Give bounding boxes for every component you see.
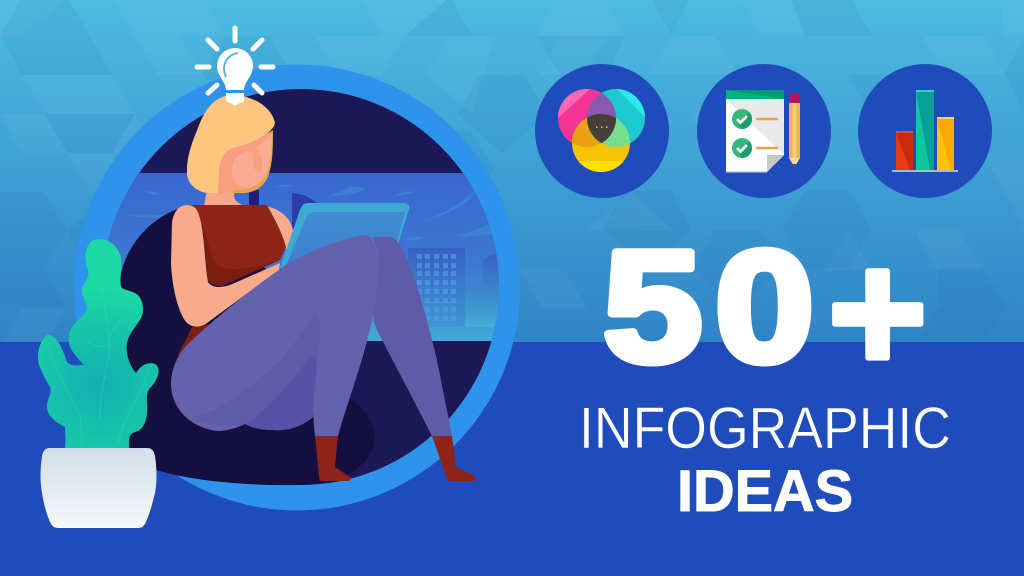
hair back rim — [232, 130, 273, 193]
dress lower — [177, 324, 220, 357]
pot — [40, 448, 156, 528]
face — [232, 134, 272, 187]
tablet — [280, 203, 409, 270]
right shoulder — [262, 205, 293, 250]
dress — [190, 205, 286, 286]
icon: bar chart — [858, 64, 992, 198]
near thigh and shin — [171, 235, 378, 436]
potted plant — [38, 239, 159, 528]
headline: 50+ — [603, 218, 927, 408]
far leg — [373, 237, 452, 436]
office building — [408, 248, 465, 327]
leaf veins — [47, 265, 148, 445]
headline: 50+: + — [828, 218, 927, 408]
window scene disc — [100, 85, 500, 490]
boots — [315, 436, 350, 481]
bean bag chair — [113, 205, 374, 485]
thigh shade — [193, 314, 320, 430]
face shadow — [215, 132, 271, 195]
woman reading a tablet — [171, 28, 476, 481]
arm — [171, 205, 280, 327]
hair — [187, 95, 275, 193]
icon: venn diagram — [535, 64, 669, 198]
subtitle: infographic: INFOGRAPHIC — [579, 396, 951, 461]
stepped building — [465, 254, 500, 327]
thigh deep shade — [245, 357, 317, 430]
icon: checklist and pencil — [697, 64, 831, 198]
check items — [732, 109, 752, 129]
ring around illustration — [74, 64, 520, 510]
clouds — [124, 185, 492, 240]
blue ground band — [0, 342, 1024, 576]
pencil — [789, 93, 800, 103]
dark tower behind neck — [249, 190, 259, 205]
dress shading — [197, 213, 280, 286]
neck — [204, 186, 244, 206]
headline: 50+: 50 — [603, 218, 814, 395]
leaves — [38, 239, 159, 448]
rounded tower — [292, 193, 317, 232]
background: hexagon pattern sky — [0, 0, 1024, 342]
light bulb — [197, 28, 273, 106]
subtitle: ideas: IDEAS — [677, 459, 853, 524]
